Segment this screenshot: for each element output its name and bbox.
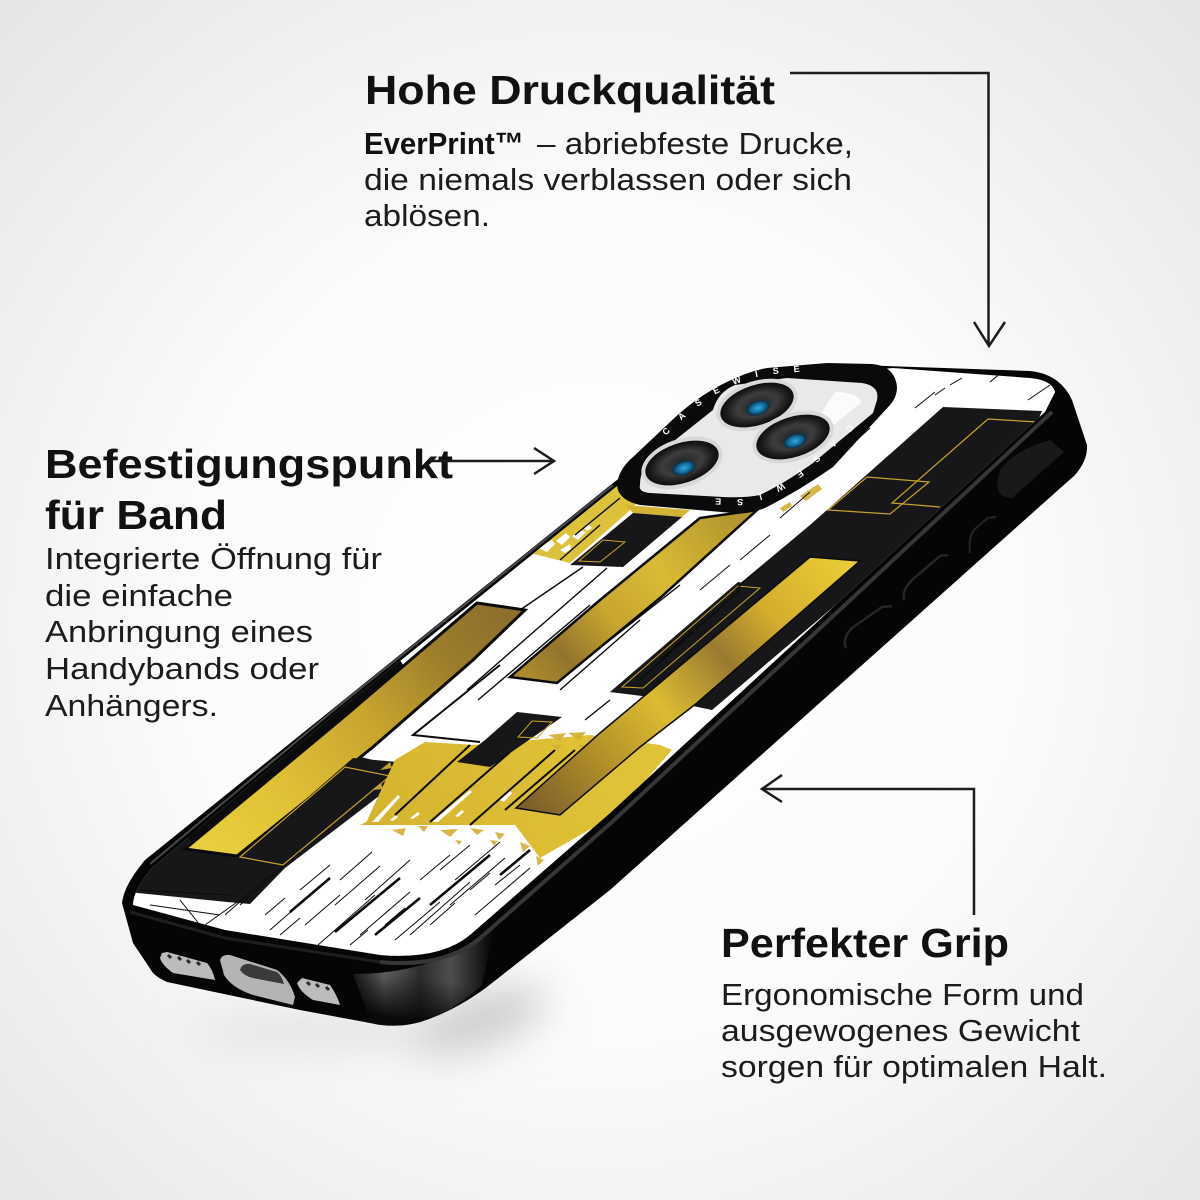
body text: Anbringung eines (45, 614, 313, 649)
body text: die niemals verblassen oder sich (364, 162, 852, 197)
brush scratches (140, 372, 1050, 945)
printed back design (120, 360, 1070, 970)
charging port (220, 955, 295, 1005)
white panel outline (413, 665, 500, 742)
body text: Integrierte Öffnung für (45, 541, 382, 576)
arrow to camera ring (430, 448, 554, 474)
body text (721, 977, 1107, 1084)
callout: grip (721, 775, 1107, 1084)
speaker port right (297, 978, 340, 1005)
body text: Ergonomische Form und (721, 977, 1084, 1012)
rough black edge along rim (185, 660, 405, 845)
camera bump (617, 363, 897, 514)
arrow to case side (762, 775, 974, 915)
camera window (640, 378, 877, 497)
side button: volume down (845, 606, 892, 648)
camera ring outer (617, 363, 897, 513)
gold stripe left (185, 603, 525, 856)
body text: ablösen. (364, 198, 490, 233)
white flecks in central gold (372, 790, 512, 822)
heading: Perfekter Grip (721, 920, 1009, 966)
white strip at upper edge of black block (1052, 388, 1055, 398)
black panel right with gold outline (610, 582, 762, 695)
black panel, upper small (570, 513, 682, 567)
brand text on ring, bottom: CASEWISE (716, 426, 853, 506)
body text: sorgen für optimalen Halt. (721, 1049, 1107, 1084)
gold stripe centre (510, 510, 757, 683)
side button: volume up (904, 555, 948, 600)
callout: strap attachment (45, 441, 554, 723)
brand text on ring, top: CASEWISE (662, 366, 800, 434)
arrow to top edge (790, 73, 1005, 346)
top right black block (610, 407, 1042, 710)
gold speckle band (360, 469, 822, 866)
body text (45, 541, 382, 723)
glossy corner highlight (353, 925, 495, 1026)
heading (45, 441, 453, 538)
lens left (635, 427, 729, 499)
white base (120, 360, 1070, 970)
body text: – abriebfeste Drucke, (537, 126, 853, 161)
central gold field (365, 735, 672, 858)
black panel with gold outline, lower left (238, 758, 394, 866)
bottom left black block (136, 757, 379, 904)
body text: die einfache (45, 578, 233, 613)
speaker port left (160, 952, 215, 980)
lens right (746, 401, 840, 473)
body text: EverPrint™ (364, 126, 524, 161)
heading: Befestigungspunkt (45, 441, 453, 487)
left rim line (150, 485, 613, 864)
callout: print quality (364, 67, 1005, 346)
lower rim line (130, 912, 380, 962)
phone case illustration (122, 363, 1088, 1026)
lens top (710, 369, 804, 441)
case body silhouette (122, 364, 1087, 1026)
gold outlines on top right block (828, 419, 1037, 514)
gold stripe upper left (530, 485, 642, 563)
bumper rim highlight (380, 412, 1052, 963)
phone drop shadow (190, 975, 553, 1065)
body text: Handybands oder (45, 651, 319, 686)
black panel, centre (457, 712, 562, 767)
side button: action (970, 517, 996, 553)
gold thin strip under the ring (625, 505, 690, 517)
heading: Hohe Druckqualität (365, 67, 775, 113)
heading: für Band (45, 492, 227, 538)
window light reflection (819, 392, 862, 428)
body text: ausgewogenes Gewicht (721, 1013, 1080, 1048)
body text: Anhängers. (45, 688, 218, 723)
gold stripe right (516, 557, 860, 815)
body text (364, 126, 853, 233)
mottled speckle on upper gold (538, 525, 592, 553)
side strap slot (997, 440, 1064, 498)
